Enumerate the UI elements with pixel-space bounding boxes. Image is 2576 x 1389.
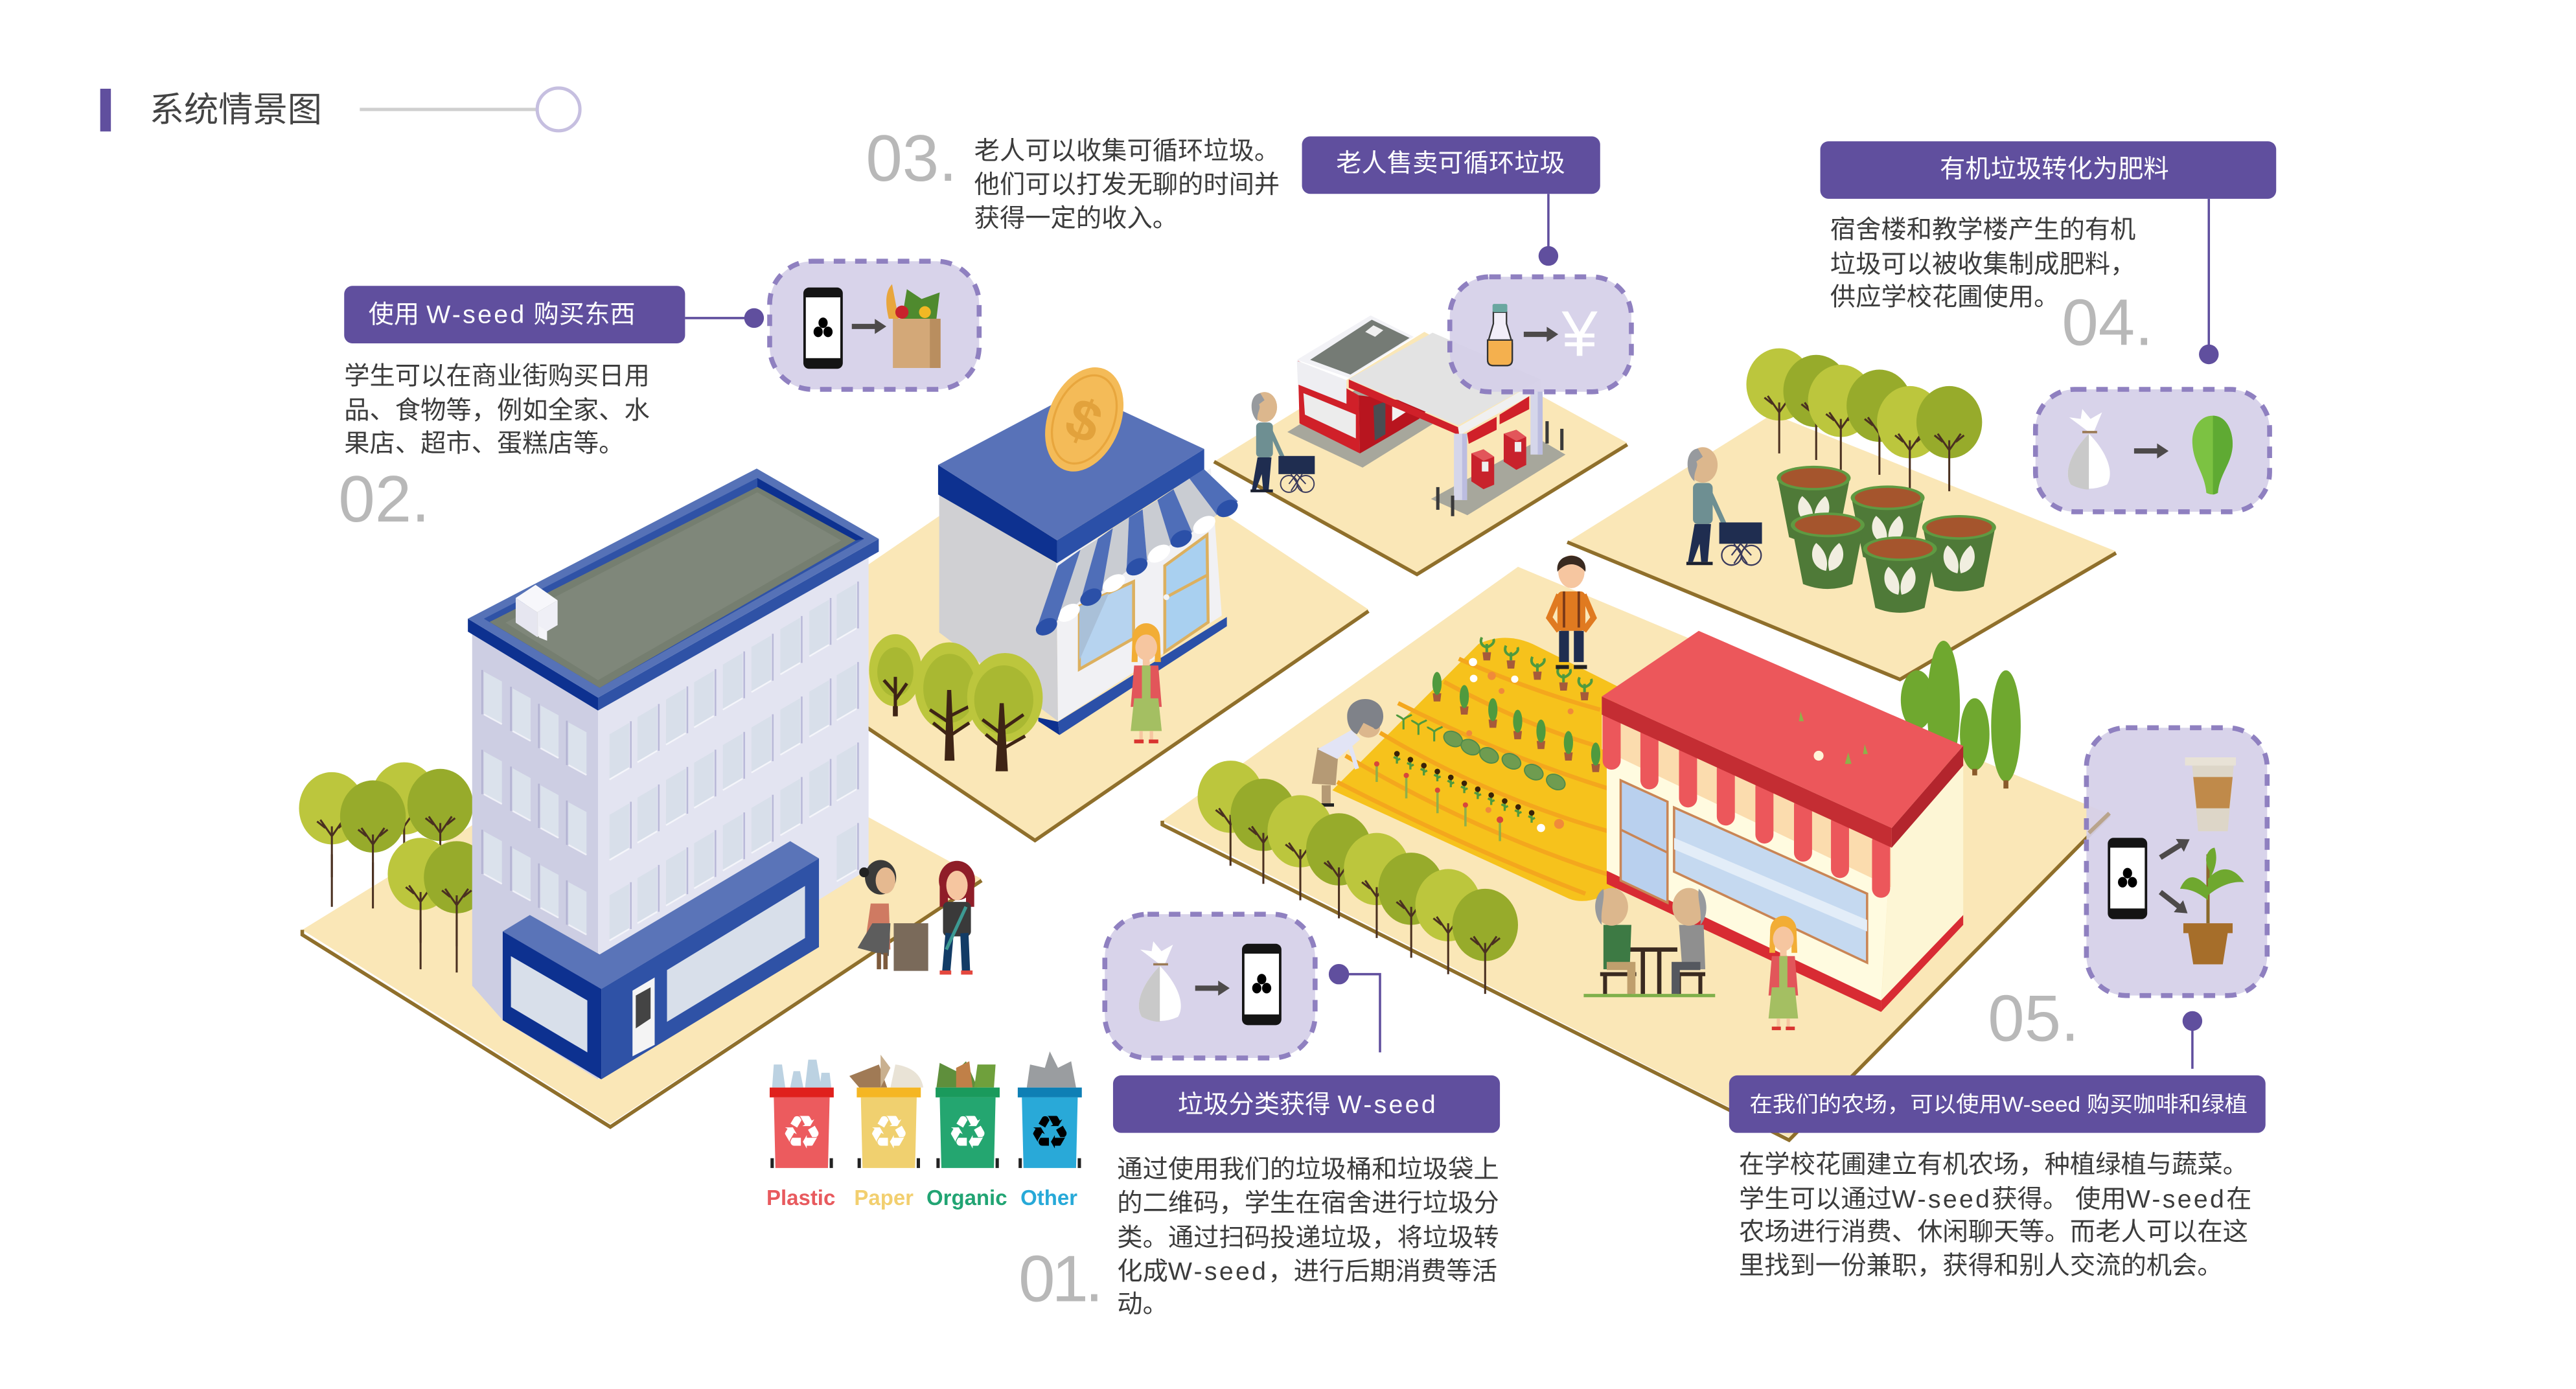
step 05 xyxy=(1729,981,2266,1280)
step 03 xyxy=(866,122,1600,266)
ground plate: compost xyxy=(1567,414,2116,680)
bin: organic: Organic xyxy=(926,1186,1007,1210)
icon bubble: bottle to yuan: ¥ xyxy=(1561,297,1598,369)
icon bubble: bottle to yuan xyxy=(1450,277,1631,392)
gold coin with dollar sign xyxy=(1031,356,1138,483)
bin: paper: ♻ xyxy=(868,1105,910,1159)
bin: plastic xyxy=(766,1060,835,1210)
elderly pair at table xyxy=(1583,888,1715,996)
bin: paper xyxy=(849,1055,923,1210)
canopy xyxy=(1349,380,1459,435)
students sorting rubbish xyxy=(858,860,975,972)
bin: organic: ♻ xyxy=(947,1105,988,1159)
tall trees behind cafe xyxy=(1901,641,2021,788)
waitress xyxy=(1769,916,1798,1028)
description: 通过使用我们的垃圾桶和垃圾袋上 xyxy=(1117,1155,1499,1184)
bin: paper: Paper xyxy=(854,1186,914,1210)
step 03: 老人可以收集可循环垃圾。 xyxy=(974,137,1280,165)
step 05: 学生可以通过W-seed获得。 使用W-seed在 xyxy=(1739,1185,2251,1213)
dustbins xyxy=(766,1051,1082,1210)
icon bubble: phone to coffee and plant xyxy=(2086,728,2267,996)
step 04: 供应学校花圃使用。 xyxy=(1830,283,2059,312)
icon bubble: bag to lettuce xyxy=(2036,389,2270,512)
farmer crouching xyxy=(1312,699,1383,805)
step 05: 农场进行消费、休闲聊天等。而老人可以在这 xyxy=(1739,1217,2248,1246)
step 03: 老人售卖可循环垃圾 xyxy=(1336,149,1565,178)
hedge trees on farm plate xyxy=(1198,761,1518,994)
plant pot xyxy=(2180,847,2244,964)
step 04: 垃圾可以被收集制成肥料， xyxy=(1830,250,2135,279)
red base xyxy=(1607,871,1963,1012)
shopper xyxy=(1131,623,1162,741)
bin: plastic: Plastic xyxy=(766,1186,835,1210)
kiosk xyxy=(1297,316,1414,378)
step 04: 宿舍楼和教学楼产生的有机 xyxy=(1830,216,2135,244)
step 02: 学生可以在商业街购买日用 xyxy=(344,362,650,390)
step 05: 在我们的农场，可以使用W-seed 购买咖啡和绿植 xyxy=(1750,1092,2248,1117)
description: 化成W-seed，进行后期消费等活 xyxy=(1117,1257,1497,1285)
step 02: 果店、超市、蛋糕店等。 xyxy=(344,429,624,457)
step 05: 05. xyxy=(1988,981,2079,1055)
awning xyxy=(1602,700,1891,887)
step 04 xyxy=(1821,141,2276,364)
roof xyxy=(468,468,879,711)
gold coin with dollar sign: $ xyxy=(1057,385,1110,456)
shop window xyxy=(1079,535,1208,669)
connector xyxy=(1330,965,1380,1052)
farm field xyxy=(1332,637,1618,901)
awning stripes xyxy=(1033,469,1241,639)
step 02 xyxy=(338,286,764,536)
crops xyxy=(1374,637,1600,841)
step 05: 里找到一份兼职，获得和别人交流的机会。 xyxy=(1739,1251,2223,1280)
bin: plastic: ♻ xyxy=(781,1105,822,1159)
icon bubble: bag to phone xyxy=(1105,914,1315,1058)
bin: other xyxy=(1018,1051,1082,1210)
ground plate: shop xyxy=(748,419,1368,840)
dormitory building xyxy=(468,468,879,1079)
number: 01. xyxy=(1018,1242,1100,1315)
step 02: 使用 W-seed 购买东西 xyxy=(369,300,636,328)
step 04: 04. xyxy=(2062,286,2153,360)
recycling station xyxy=(1287,316,1565,516)
shop trees front xyxy=(915,642,1042,772)
section heading: 系统情景图 xyxy=(100,88,580,132)
ground plate: dormitory xyxy=(303,706,982,1127)
label xyxy=(1113,1075,1500,1133)
ground plate: farm xyxy=(1162,567,2110,1140)
description: 的二维码，学生在宿舍进行垃圾分 xyxy=(1117,1189,1499,1217)
roof xyxy=(938,391,1204,563)
step 01 xyxy=(1018,965,1500,1318)
step 03: 获得一定的收入。 xyxy=(974,204,1178,233)
farmer standing xyxy=(1549,555,1594,667)
plate corner overlapping bubble xyxy=(2089,813,2110,833)
trees left of dormitory xyxy=(299,763,490,972)
step 04: 有机垃圾转化为肥料 xyxy=(1940,155,2169,183)
ground floor xyxy=(503,841,819,1079)
windows left face xyxy=(482,670,586,935)
windows xyxy=(1620,780,1867,963)
step 02: 品、食物等，例如全家、水 xyxy=(344,396,650,425)
elderly man with cart at station xyxy=(1250,392,1315,492)
shop xyxy=(869,356,1241,772)
ground plate: recycling station xyxy=(1214,332,1627,575)
section heading: 系统情景图: 系统情景图 xyxy=(150,91,322,130)
bin: other: Other xyxy=(1020,1186,1077,1210)
coffee cup xyxy=(2185,757,2236,831)
description: 类。通过扫码投递垃圾，将垃圾转 xyxy=(1117,1223,1499,1252)
step 05: 在学校花圃建立有机农场，种植绿植与蔬菜。 xyxy=(1739,1151,2248,1179)
description: 动。 xyxy=(1117,1290,1168,1318)
windows right face xyxy=(610,582,858,941)
cafe xyxy=(1602,631,1963,1012)
icon bubble: phone to shopping bag xyxy=(770,261,979,389)
elderly man with cart at compost xyxy=(1686,447,1762,565)
step 02: 02. xyxy=(338,463,430,536)
compost pots xyxy=(1777,466,1996,613)
pillars and pumps xyxy=(1438,391,1562,516)
walls xyxy=(939,494,1058,721)
shop tree back xyxy=(869,634,922,717)
bin: organic xyxy=(926,1061,1007,1210)
step 03: 03. xyxy=(866,122,957,195)
bin: other: ♻ xyxy=(1029,1105,1070,1159)
step 03: 他们可以打发无聊的时间并 xyxy=(974,170,1280,199)
rooftop unit xyxy=(516,585,558,641)
label: 垃圾分类获得 W-seed xyxy=(1178,1090,1438,1119)
roof xyxy=(1602,631,1963,847)
isometric scene illustration xyxy=(299,316,2116,1140)
compost trees xyxy=(1746,349,1982,491)
